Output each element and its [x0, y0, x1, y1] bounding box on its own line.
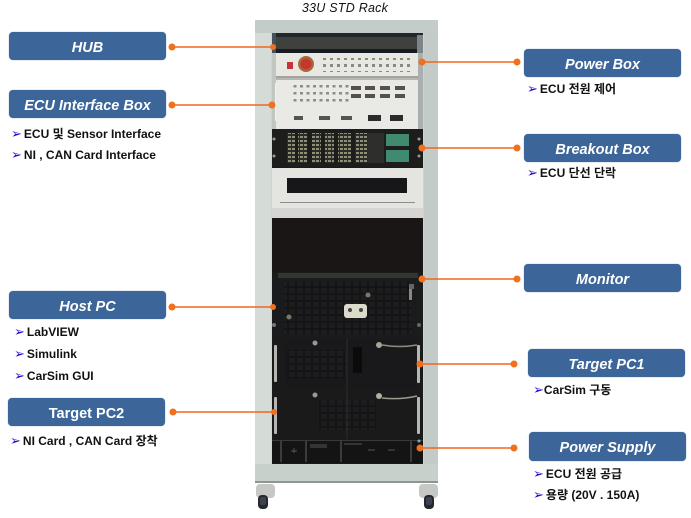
label: Power Box	[524, 49, 681, 77]
Power Box panel	[276, 53, 418, 78]
text: Simulink: ➢Simulink	[14, 347, 77, 362]
leader: Target PC1	[416, 360, 518, 368]
leader: Monitor	[418, 276, 520, 282]
leader: HUB	[168, 44, 276, 50]
leader: Target PC2	[170, 408, 277, 416]
gray blank panel with slot	[272, 168, 423, 218]
label: HUB: HUB	[72, 40, 103, 56]
label: HUB	[9, 32, 166, 60]
text: NI Card: ➢NI Card , CAN Card 장착	[10, 434, 158, 449]
label: Power Box: Power Box	[565, 57, 640, 73]
label: Host PC	[9, 291, 166, 319]
text: CarSim drive: ➢CarSim 구동	[533, 383, 611, 398]
text: LabVIEW: ➢LabVIEW	[14, 325, 79, 340]
label: Target PC2	[8, 398, 165, 426]
label: Monitor	[524, 264, 681, 292]
leader: Power Supply	[416, 444, 518, 452]
title: 33U STD Rack	[302, 1, 388, 15]
ECU Interface Box panel	[276, 78, 418, 129]
Breakout Box panel	[272, 129, 422, 167]
HUB unit	[272, 33, 423, 55]
label: Breakout Box	[524, 134, 681, 162]
label: ECU Interface Box	[9, 90, 166, 118]
leader: Breakout Box	[418, 144, 520, 152]
Monitor and Host PC unit	[272, 272, 423, 337]
Power Supply unit	[272, 440, 423, 463]
inner rack dark background	[272, 33, 423, 464]
leader: Host PC	[168, 304, 276, 310]
Target PC1 unit	[274, 338, 420, 388]
caster wheels	[256, 484, 438, 509]
text: ECU interface line 2: ➢NI , CAN Card Interface	[11, 148, 156, 163]
label: Target PC2: Target PC2	[49, 406, 124, 422]
text: ECU power supply: ➢ECU 전원 공급	[533, 467, 622, 482]
text: CarSim GUI: ➢CarSim GUI	[14, 369, 94, 384]
label: Breakout Box: Breakout Box	[555, 142, 650, 158]
label: ECU Interface Box: ECU Interface Box	[24, 98, 151, 114]
label: Monitor: Monitor	[576, 272, 629, 288]
Target PC2 unit	[274, 389, 420, 439]
rack frame	[255, 20, 438, 483]
label: Target PC1: Target PC1	[568, 357, 644, 373]
text: ECU power control: ➢ECU 전원 제어	[527, 82, 616, 97]
black blank panel	[272, 218, 423, 272]
text: capacity: ➢용량 (20V . 150A)	[533, 488, 639, 503]
leader: ECU Interface Box	[168, 102, 276, 108]
label: Power Supply: Power Supply	[560, 440, 655, 456]
text: ECU interface line 1: ➢ECU 및 Sensor Interface	[11, 127, 161, 142]
label: Host PC: Host PC	[59, 299, 116, 315]
label: Target PC1	[528, 349, 685, 377]
leader: Power Box	[418, 58, 520, 66]
label: Power Supply	[529, 432, 686, 461]
side brackets	[272, 53, 423, 129]
text: ECU wire break: ➢ECU 단선 단락	[527, 166, 616, 181]
